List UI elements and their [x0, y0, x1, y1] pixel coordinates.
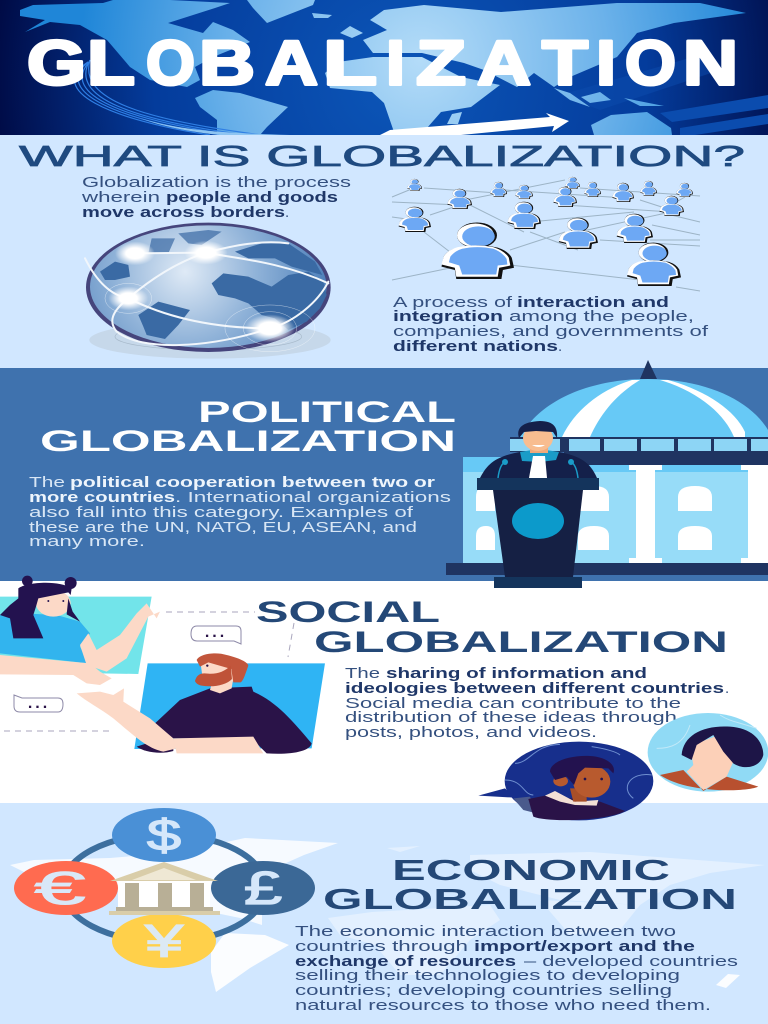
- text block: definition: [81, 174, 351, 221]
- text block: process: integration: [393, 308, 503, 325]
- icon: yen: ¥: [144, 916, 184, 967]
- heading: SOCIAL: [256, 596, 440, 629]
- icon: speech bubble left: [14, 695, 63, 712]
- icon: speech bubble left: ...: [28, 695, 50, 712]
- heading: [256, 596, 728, 659]
- text block: definition: .: [285, 204, 289, 221]
- heading: GLOBALIZATION: [314, 626, 728, 659]
- panel: social globalization: [0, 576, 768, 803]
- icon: pound: [211, 861, 315, 915]
- text block: definition: Globalization is the process: [82, 174, 351, 191]
- text block: process: different nations: [393, 338, 558, 355]
- icon: bank: [109, 862, 220, 915]
- text block: economic: import/export and the: [474, 938, 695, 955]
- icon: speech bubble top: [191, 624, 241, 644]
- text block: political: . International organizations: [175, 489, 451, 506]
- text block: economic: [295, 923, 738, 1014]
- panel: what is globalization: [0, 135, 768, 369]
- illustration: woman: [0, 576, 160, 685]
- swoosh lines: [75, 60, 262, 135]
- title: O: [625, 28, 676, 98]
- illustration: woman avatar circle: [648, 713, 768, 792]
- text block: political: The: [29, 474, 65, 491]
- text block: economic: natural resources to those who need them.: [295, 997, 711, 1014]
- text block: economic: exchange of resources: [295, 953, 516, 970]
- text block: process: companies, and governments of: [393, 323, 709, 340]
- panel: political globalization: [0, 360, 768, 581]
- title: A: [265, 28, 318, 98]
- text block: political: [29, 474, 451, 550]
- illustration: bearded man: [77, 653, 325, 754]
- title: L: [87, 28, 135, 98]
- title: L: [323, 28, 377, 98]
- heading: ECONOMIC: [392, 855, 670, 887]
- text block: economic: countries through: [295, 938, 468, 955]
- text block: social: posts, photos, and videos.: [345, 724, 597, 741]
- icon: euro: [14, 861, 118, 915]
- text block: definition: wherein: [81, 189, 160, 206]
- text block: definition: move across borders: [82, 204, 285, 221]
- diagram: currency ring: [14, 808, 315, 968]
- icon: glowing globe: [85, 223, 331, 359]
- band lights: [560, 55, 768, 135]
- icon: speech bubble top: ...: [205, 624, 227, 641]
- text block: economic: selling their technologies to developing: [295, 967, 680, 984]
- text block: social: ideologies between different countries: [345, 680, 724, 697]
- icon: euro: €: [34, 863, 86, 914]
- heading: [323, 855, 737, 916]
- text block: process: among the people,: [509, 308, 694, 325]
- heading: [40, 396, 456, 458]
- panel: header banner: [0, 0, 768, 135]
- heading: POLITICAL: [198, 396, 456, 429]
- arrow: [380, 113, 569, 135]
- text block: social: sharing of information and: [386, 665, 647, 682]
- world map: [10, 838, 765, 992]
- diagram: people network: [392, 177, 700, 291]
- text block: social: [345, 665, 729, 741]
- text block: political: also fall into this category. Examples of: [29, 504, 414, 521]
- text block: social: .: [725, 680, 729, 697]
- text block: political: these are the UN, NATO, EU, ASEAN, and: [29, 519, 417, 536]
- icon: yen: [112, 914, 216, 968]
- text block: political: political cooperation between two or: [70, 474, 435, 491]
- text block: process: [393, 294, 709, 355]
- illustration: man avatar circle: [478, 742, 653, 820]
- heading: GLOBALIZATION: [323, 884, 737, 916]
- title: N: [683, 28, 738, 98]
- text block: political: many more.: [29, 533, 145, 550]
- text block: economic: The economic interaction between two: [295, 923, 676, 940]
- text block: economic: countries; developing countries selling: [295, 982, 672, 999]
- text block: economic: – developed countries: [524, 953, 738, 970]
- icon: pound: £: [244, 863, 282, 914]
- icon: dollar: $: [147, 811, 181, 860]
- title: I: [596, 28, 616, 98]
- title: B: [199, 28, 255, 98]
- icon: dollar: [112, 808, 216, 862]
- heading: WHAT IS GLOBALIZATION?: [19, 141, 745, 173]
- title: T: [542, 28, 588, 98]
- text block: political: more countries: [29, 489, 175, 506]
- text block: definition: people and goods: [166, 189, 338, 206]
- icon: speaker at podium: [477, 421, 599, 577]
- title: Z: [416, 28, 466, 98]
- world map: [20, 0, 746, 135]
- heading: GLOBALIZATION: [40, 425, 456, 458]
- title: G: [27, 28, 86, 98]
- text block: social: Social media can contribute to the: [345, 695, 681, 712]
- text block: process: A process of: [393, 294, 513, 311]
- title: I: [386, 28, 405, 98]
- text block: social: distribution of these ideas through: [345, 709, 677, 726]
- text block: process: interaction and: [517, 294, 669, 311]
- title: A: [477, 28, 531, 98]
- title: O: [146, 28, 195, 98]
- icon: capitol building: [446, 360, 768, 575]
- panel: economic globalization: [0, 803, 768, 1024]
- text block: social: The: [345, 665, 380, 682]
- text block: process: .: [558, 338, 562, 355]
